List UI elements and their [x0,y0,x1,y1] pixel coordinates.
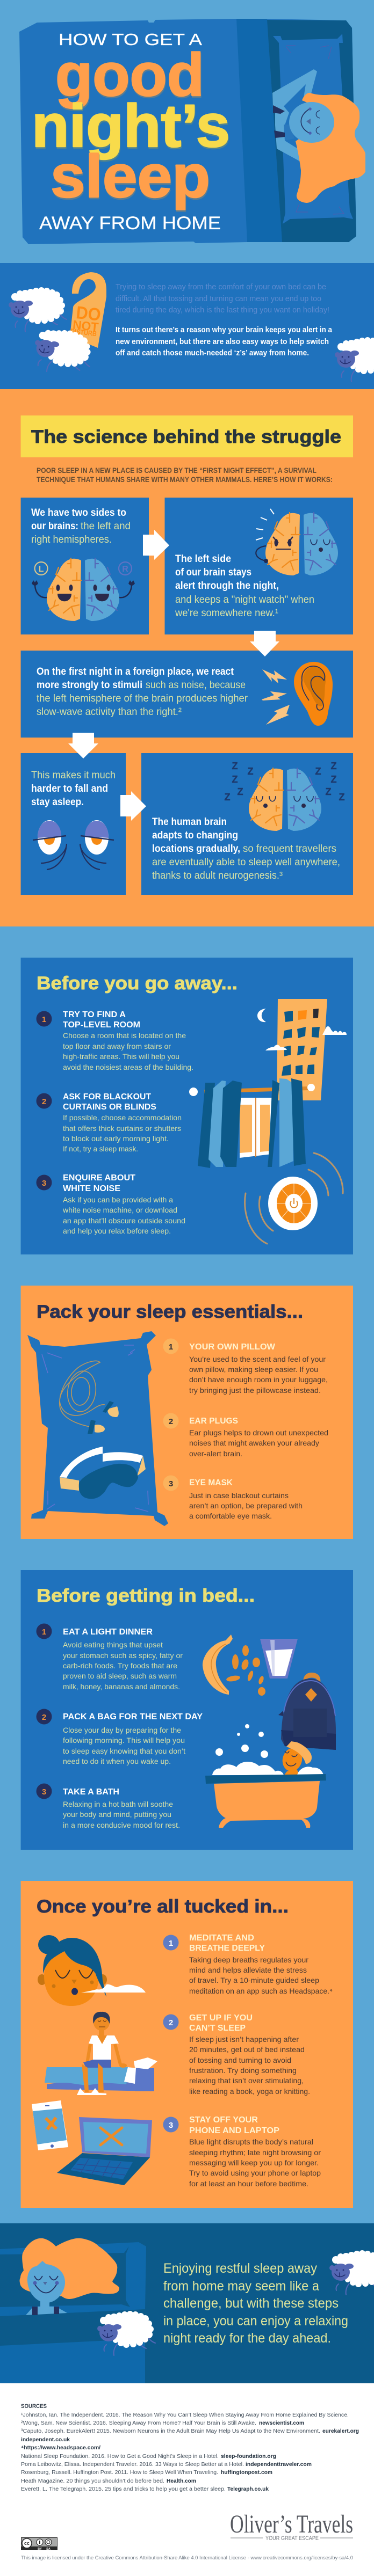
tip 1: 1 [42,1628,46,1637]
item 2: get up: 2 [169,2018,173,2027]
tip 2: that offers thick curtains or shutters [63,1124,181,1133]
tip 1: high-traffic areas. This will help you [63,1052,179,1061]
item 3: eye mask: EYE MASK [189,1478,233,1487]
text: This makes it much [31,769,116,781]
text: locations gradually, [152,843,240,855]
item 3: stay off devices: 3 [169,2121,173,2130]
icon: laptop [57,2117,152,2185]
panel: before you go away [21,958,353,1254]
sources: eurekalert.org [322,2428,359,2434]
intro text: difficult. All that tossing and turning can mean you end up too [116,294,321,303]
closing text: night ready for the day ahead. [163,2331,331,2346]
licence text: This image is licensed under the Creative Commons Attribution-Share Alike 4.0 International License - www.creativecommons.org/licenses/by-sa/4.0 [21,2555,353,2561]
icon: sleeping brain: Z [331,761,336,771]
heading: Before getting in bed... [37,1586,255,1606]
item 1: meditate: 1 [169,1939,173,1948]
tip 2: PACK A BAG FOR THE NEXT DAY [63,1712,203,1721]
heading: Pack your sleep essentials... [37,1302,303,1322]
intro text: off and catch those much-needed ‘z’s’ away from home. [116,348,309,357]
tip 1: Avoid eating things that upset [63,1640,163,1649]
tip 3: your body and mind, putting you [63,1810,171,1819]
icon: banana [203,1634,233,1695]
tip 1: TRY TO FIND A [63,1010,126,1019]
item 3: stay off devices: for at least an hour before bedtime. [189,2179,308,2188]
panel: react to stimuli [21,651,353,738]
item 3: stay off devices [163,2115,321,2188]
text: more strongly to stimuli [37,679,142,691]
panel: closing message [0,2238,374,2383]
text: of our brain stays [175,566,251,578]
icon: sleeping brain [225,761,345,831]
text: first night effect [37,466,333,484]
icon: sleeping brain: Z [225,792,230,802]
tip 3: in a more conducive mood for rest. [63,1821,180,1829]
panel: introduction [9,272,374,382]
item 1: your own pillow: don’t have enough room in your luggage, [189,1375,328,1384]
tip 1: proven to aid sleep, such as warm [63,1672,177,1680]
tip 1: top floor and away from stairs or [63,1042,171,1050]
item 2: ear plugs: noises that might awaken your already [189,1439,319,1447]
tip 1: 1 [42,1015,46,1024]
pillow [273,34,353,224]
icon: happy brain [32,558,135,621]
text: so frequent travellers [243,843,336,855]
text: slow-wave activity than the right.² [37,706,182,718]
icon: man sitting on bed [45,2012,157,2095]
tip 1: carb-rich foods. Try foods that are [63,1661,177,1670]
tip 2: 2 [42,1097,46,1106]
item 1: meditate [163,1933,333,1995]
text: first night effect: TECHNIQUE THAT HUMANS SHARE WITH MANY OTHER MAMMALS. HERE’S HOW IT WORKS: [37,476,333,484]
icon: backpack [278,1673,336,1750]
sources: Rosenburg, Russell. Huffington Post. 2011. How to Sleep Well When Traveling. [21,2469,218,2476]
intro text: tired during the day, which is the last thing you want on holiday! [116,305,329,315]
item 3: eye mask: aren’t an option, be prepared with [189,1501,303,1510]
item 2: get up: 20 minutes, get out of bed instead [189,2045,305,2054]
icon: ear with lightning [262,662,333,726]
text: thanks to adult neurogenesis.³ [152,870,283,881]
icon: sleeping brain: Z [238,786,243,797]
sources: newscientist.com [259,2420,304,2426]
tip 3: TAKE A BATH [63,1787,119,1797]
tip 1 [37,1623,183,1691]
icon: hotel building [257,999,347,1100]
tip 3: white noise machine, or download [62,1206,177,1214]
tip 2: ASK FOR BLACKOUT [63,1092,152,1101]
text: On the first night in a foreign place, we react [37,666,234,677]
icon: woman breathing [38,1935,146,2006]
title: sleep [51,143,210,210]
sources: sleep-foundation.org [221,2453,276,2460]
item 3: stay off devices: Try to avoid using your phone or laptop [189,2169,321,2177]
item 1: meditate: MEDITATE AND [189,1933,254,1943]
icon: sleeping brain: Z [331,774,336,785]
book spine [236,19,282,242]
tip 2: to block out early morning light. [63,1134,169,1143]
sleeping woman illustration [272,46,365,214]
icon: do not disturb door hanger: DISTURB [70,327,97,338]
icon: bath tub [205,1724,326,1828]
item 1: meditate: of travel. Try a 10-minute guided sleep [189,1976,319,1984]
arrow: right 1 [143,530,169,560]
text: such as noise, because [146,679,246,691]
heading: Once you’re all tucked in... [37,1896,289,1917]
badge: creative commons: cc [24,2541,30,2546]
icon: sheep lower [97,2311,155,2355]
text [175,553,314,619]
icon: curtains and window [189,1078,315,1168]
intro text: new environment, but there are also easy ways to help switch [116,337,329,346]
text [152,816,340,881]
icon: phone [32,2100,68,2150]
icon: sleeping brain: Z [232,774,238,785]
icon: alert brain [256,509,338,575]
badge: creative commons: SA [46,2548,51,2551]
icon: sleeping brain: Z [232,761,238,771]
text: we're somewhere new.¹ [175,607,278,619]
heading [21,415,353,457]
panel: the science behind the struggle [21,415,353,895]
tip 3: WHITE NOISE [63,1184,120,1193]
icon: sleeping brain: Z [339,792,345,802]
text [31,769,116,808]
tip 2 [37,1709,203,1765]
item 2: get up: If sleep just isn’t happening after [189,2035,299,2044]
item 1: meditate: mind and helps alleviate the stress [189,1966,307,1974]
icon: happy brain: R [122,565,128,574]
icon: sleeping woman in bed [0,2238,146,2383]
icon: do not disturb door hanger [70,272,106,348]
sources: ⁴https://www.headspace.com/ [21,2444,100,2451]
item 1: your own pillow: own pillow, making sleep easier. If you [189,1365,318,1374]
tip 2: following morning. This will help you [63,1736,185,1745]
text: and keeps a "night watch" when [175,594,314,605]
item 1: meditate: meditation on an app such as Headspace.⁴ [189,1987,333,1995]
icon: sheep left [9,287,67,332]
item 2: get up: of tossing and turning to avoid [189,2056,291,2064]
text: The left side [175,553,231,565]
intro text [116,282,333,357]
title: AWAY FROM HOME [39,213,221,233]
icon: pillow with earplugs and eye mask [27,1331,168,1526]
item 3: stay off devices: Blue light disrupts the body’s natural [189,2137,313,2146]
tip 2: need to do it when you wake up. [63,1757,171,1765]
tip 1: TOP-LEVEL ROOM [63,1020,140,1030]
sources: SOURCES [21,2403,47,2410]
icon: sheep right [335,337,374,382]
tip 1: avoid the noisiest areas of the building. [63,1063,193,1071]
sources: Heath Magazine. 20 things you shouldn’t do before bed. [21,2478,164,2484]
sources [21,2403,359,2492]
text: right hemispheres. [31,534,112,545]
icon: do not disturb door hanger: DO [75,302,102,325]
item 3: eye mask: a comfortable eye mask. [189,1512,272,1520]
tip 3: Relaxing in a hot bath will soothe [63,1800,173,1808]
tip 1: milk, honey, bananas and almonds. [63,1682,180,1691]
tip 1: your stomach such as spicy, fatty or [63,1651,183,1660]
icon: sleeping brain: Z [247,766,254,777]
panel: book cover header [19,19,365,244]
text: are eventually able to sleep well anywhere, [152,856,340,868]
item 2: get up: CAN’T SLEEP [189,2024,246,2033]
item 2: ear plugs: EAR PLUGS [189,1417,238,1426]
item 2: get up: relaxing that isn’t over stimulating, [189,2076,304,2085]
arrow: right 2 [120,791,146,821]
closing text [163,2261,348,2346]
icon: sheep middle [31,325,95,379]
icon: tired eyes [33,820,114,870]
item 1: meditate: Taking deep breaths regulates your [189,1955,308,1964]
tip 1: EAT A LIGHT DINNER [63,1628,153,1637]
tip 2: If possible, choose accommodation [63,1113,182,1122]
sources: Everett, L. The Telegraph. 2015. 25 tips and tricks to help you get a better sleep. [21,2486,226,2492]
item 1: meditate: BREATHE DEEPLY [189,1944,265,1953]
tip 3: 3 [42,1787,46,1797]
icon: sheep upper right [329,2250,374,2295]
text: alert through the night, [175,580,279,592]
item 2: ear plugs: 2 [169,1417,173,1426]
closing text: in place, you can enjoy a relaxing [163,2314,348,2329]
item 2: ear plugs: over-alert brain. [189,1449,242,1458]
tip 2: to sleep easy knowing that you don’t [63,1747,185,1755]
sources: ³Caputo, Joseph. EurekAlert! 2015. Newborn Neurons in the Adult Brain May Help Us Adapt to the New Environment. [21,2428,320,2434]
arrow: down 1 [250,631,279,656]
heading: The science behind the struggle [31,427,341,447]
text: The human brain [152,816,227,828]
tip 3: Ask if you can be provided with a [63,1195,173,1204]
closing text: challenge, but with these steps [163,2296,339,2311]
icon: sleeping brain: Z [315,766,321,777]
item 1: your own pillow [163,1339,328,1395]
item 3: eye mask: 3 [169,1479,173,1488]
tip 2: 2 [42,1713,46,1722]
text: the left and [81,520,131,532]
text: the left hemisphere of the brain produces higher [37,692,248,704]
item 2: ear plugs: Ear plugs helps to drown out unexpected [189,1428,328,1437]
badge: creative commons [21,2537,57,2551]
text: stay asleep. [31,796,84,808]
title: night’s [32,92,230,159]
item 3: stay off devices: PHONE AND LAPTOP [189,2126,279,2135]
tip 2: If not, try a sleep mask. [63,1144,138,1153]
panel: two sides of the brain [21,498,149,634]
title: good [55,41,204,108]
sources: Health.com [167,2478,196,2484]
tip 1 [37,1010,193,1071]
badge: creative commons: BY [38,2548,42,2551]
item 2: get up: frustration. Try doing something [189,2066,297,2075]
book cover shape [19,19,356,244]
panel: before getting in bed [21,1570,353,1850]
panel: brain adapts [141,753,353,895]
title: HOW TO GET A [59,30,202,49]
icon: glass of milk [260,1639,298,1679]
panel: harder to fall asleep [21,753,126,895]
icon: do not disturb door hanger: NOT [72,318,99,334]
sources: Poma Leibowitz, Elissa. Independent Traveler. 2016. 33 Ways to Sleep Better at a Hotel. [21,2461,244,2468]
title [32,30,230,233]
sources: independenttraveler.com [246,2461,312,2468]
item 3: stay off devices: STAY OFF YOUR [189,2115,258,2125]
tip 3: ENQUIRE ABOUT [63,1173,136,1183]
item 3: eye mask: Just in case blackout curtains [189,1491,289,1500]
sources: ²Wong, Sam. New Scientist. 2016. Sleeping Away From Home? Half Your Brain is Still Awake. [21,2420,256,2426]
sources: National Sleep Foundation. 2016. How to Get a Good Night’s Sleep in a Hotel. [21,2453,219,2460]
item 1: your own pillow: 1 [169,1342,173,1352]
item 3: eye mask [163,1475,303,1520]
sources: huffingtonpost.com [221,2469,272,2476]
panel: once you're all tucked in [21,1881,353,2208]
tip 3: and help you relax before sleep. [63,1227,171,1235]
tip 2 [37,1092,182,1153]
item 2: get up: like reading a book, yoga or knitting. [189,2087,310,2096]
intro text: Trying to sleep away from the comfort of your own bed can be [116,282,326,291]
arrow: down 2 [68,733,98,758]
tip 1: Choose a room that is located on the [63,1031,186,1040]
intro text: It turns out there’s a reason why your brain keeps you alert in a [116,325,333,334]
text: first night effect: POOR SLEEP IN A NEW PLACE IS CAUSED BY THE “FIRST NIGHT EFFECT”, A SURVIVAL [37,466,317,475]
closing text: Enjoying restful sleep away [163,2261,317,2276]
icon: almonds [226,1645,265,1696]
item 3: stay off devices: sleeping rhythm; late night browsing or [189,2148,321,2157]
icon: happy brain: L [39,565,44,574]
text: We have two sides to [31,507,126,519]
item 2: ear plugs [163,1413,328,1458]
tip 3 [37,1173,185,1235]
item 3: stay off devices: messaging will keep you up for longer. [189,2158,319,2167]
sources: ¹Johnston, Ian. The Independent. 2016. The Reason Why You Can’t Sleep When Staying Away From Home Explained By Science. [21,2412,349,2418]
text: harder to fall and [31,783,108,794]
item 2: get up [163,2013,310,2096]
icon: sleeping brain: Z [326,786,331,797]
logo: Oliver's Travels: YOUR GREAT ESCAPE [265,2535,319,2542]
item 1: your own pillow: try bringing just the pillowcase instead. [189,1386,321,1395]
item 1: your own pillow: YOUR OWN PILLOW [189,1342,275,1352]
text [37,666,248,718]
sources: Telegraph.co.uk [227,2486,269,2492]
sources: independent.co.uk [21,2436,70,2443]
tip 3 [37,1783,180,1829]
tip 3: an app that’ll obscure outside sound [63,1216,185,1225]
icon: white noise machine [245,1153,343,1244]
tip 2: CURTAINS OR BLINDS [63,1103,156,1112]
tip 2: Close your day by preparing for the [63,1726,181,1734]
dark bed frame [267,20,356,242]
tip 3: 3 [42,1179,46,1188]
item 2: get up: GET UP IF YOU [189,2013,253,2023]
item 1: your own pillow: You’re used to the scent and feel of your [189,1355,326,1363]
text: our brains: [31,520,78,532]
text: adapts to changing [152,829,238,841]
panel: left side alert [164,498,353,634]
heading: Before you go away... [37,973,238,994]
closing text: from home may seem like a [163,2279,319,2294]
text [31,507,131,545]
panel: pack your sleep essentials [21,1286,353,1539]
